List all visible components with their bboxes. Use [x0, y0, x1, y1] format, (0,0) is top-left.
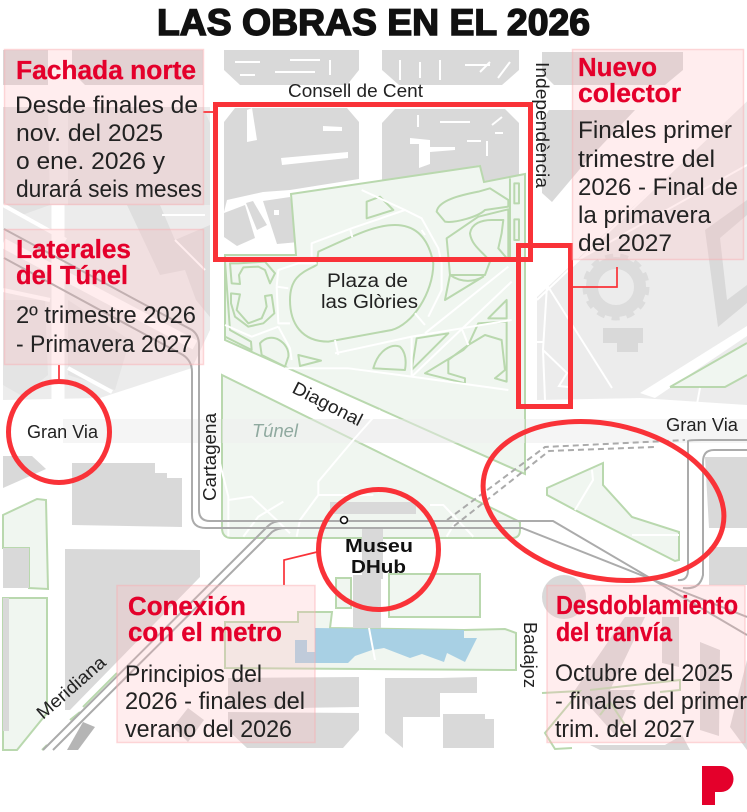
pond: [295, 628, 477, 663]
highlight: Museu DHub circle: DHub: [351, 557, 406, 577]
panel: Conexión con el metro: [117, 586, 315, 743]
panel: Laterales del Túnel: [4, 230, 204, 364]
park: Plaza de las Glòries: [225, 166, 525, 474]
left lawn shapes: [225, 262, 321, 367]
Gran Via band: [63, 419, 747, 443]
street labels: Independència: [532, 62, 552, 189]
text: Nuevo colector dates: la primavera: [578, 202, 712, 229]
text: Laterales dates: - Primavera 2027: [16, 331, 192, 358]
icon: publisher logo P: [702, 766, 734, 805]
highlight: Gran Via circle: [8, 382, 110, 482]
heading: Conexión con el metro: Conexión: [128, 593, 246, 621]
street labels: Meridiana: [33, 651, 111, 723]
upper city blocks: [224, 50, 519, 246]
Museu DHub blocks and garden: [225, 502, 516, 670]
text: Conexión dates: Principios del: [125, 661, 262, 688]
park: Túnel: [220, 375, 525, 538]
street labels: [33, 62, 739, 723]
text: Fachada norte dates: durará seis meses: [16, 176, 202, 203]
park footpaths: [225, 190, 512, 390]
highlight: Consell de Cent facade rectangle: [216, 104, 530, 260]
tram lines: [4, 229, 747, 750]
heading: Nuevo colector: Nuevo: [578, 54, 657, 82]
title: LAS OBRAS EN EL 2026: [157, 2, 590, 43]
text: Nuevo colector dates: trimestre del: [578, 146, 715, 173]
street labels: Plaza de: [327, 271, 408, 292]
street labels: Túnel: [252, 421, 299, 441]
text: Nuevo colector dates: 2026 - Final de: [578, 174, 738, 201]
text: Fachada norte dates: nov. del 2025: [16, 120, 163, 147]
right lawn shapes: [367, 178, 519, 383]
heading: Fachada norte: Fachada norte: [16, 57, 196, 85]
heading: Desdoblamiento del tranvía: [556, 592, 738, 647]
text: Nuevo colector dates: [578, 117, 738, 257]
text: Nuevo colector dates: Finales primer: [578, 117, 732, 144]
text: Conexión dates: [125, 661, 305, 743]
leader lines: [59, 112, 617, 585]
heading: Laterales del Túnel: Laterales: [16, 236, 131, 264]
lower right blocks: [542, 457, 747, 750]
panel: Nuevo colector: [572, 50, 744, 260]
text: Nuevo colector dates: del 2027: [578, 230, 672, 257]
right light-grey district: [537, 52, 747, 405]
highlight: tram ellipse: [468, 400, 739, 602]
heading: Nuevo colector: [578, 54, 681, 108]
heading: Conexión con el metro: con el metro: [128, 619, 282, 647]
heading: Desdoblamiento del tranvía: del tranvía: [556, 619, 673, 647]
text: Conexión dates: verano del 2026: [125, 716, 292, 743]
park: triangle east: [547, 463, 679, 561]
highlight: Museu DHub circle: Museu: [345, 536, 413, 556]
text: Desdoblamiento dates: - finales del primer: [555, 688, 747, 715]
lower left blocks and gardens: [3, 456, 204, 750]
street labels: Consell de Cent: [288, 81, 423, 101]
panel: Desdoblamiento del tranvía: [547, 586, 747, 743]
street labels: las Glòries: [321, 292, 418, 313]
heading: Nuevo colector: colector: [578, 80, 681, 108]
heading: Laterales del Túnel: del Túnel: [16, 262, 128, 290]
street labels: Badajoz: [520, 622, 540, 688]
central oval lawn: [290, 225, 433, 342]
text: Desdoblamiento dates: Octubre del 2025: [555, 660, 733, 687]
text: Desdoblamiento dates: [555, 660, 747, 743]
text: Laterales dates: [16, 302, 196, 358]
highlight: Museu DHub circle: [318, 490, 438, 610]
street labels: Cartagena: [200, 412, 220, 501]
station marker: [340, 516, 348, 524]
lower centre blocks: [228, 677, 494, 748]
street labels: Diagonal: [289, 378, 366, 430]
heading: Conexión con el metro: [128, 593, 282, 647]
text: Conexión dates: 2026 - finales del: [125, 688, 305, 715]
highlight: Nuevo colector rectangle: [518, 246, 570, 406]
text: Fachada norte dates: o ene. 2026 y: [16, 148, 165, 175]
highlight: Gran Via circle: Gran Via: [27, 422, 99, 442]
panel: Fachada norte: [4, 50, 204, 204]
text: Fachada norte dates: [15, 92, 202, 203]
text: Fachada norte dates: Desde finales de: [15, 92, 198, 119]
left light-grey district: [3, 50, 210, 400]
text: Laterales dates: 2º trimestre 2026: [16, 302, 196, 329]
street labels: Gran Via: [666, 415, 739, 435]
heading: Laterales del Túnel: [16, 236, 131, 290]
text: Desdoblamiento dates: trim. del 2027: [555, 716, 695, 743]
